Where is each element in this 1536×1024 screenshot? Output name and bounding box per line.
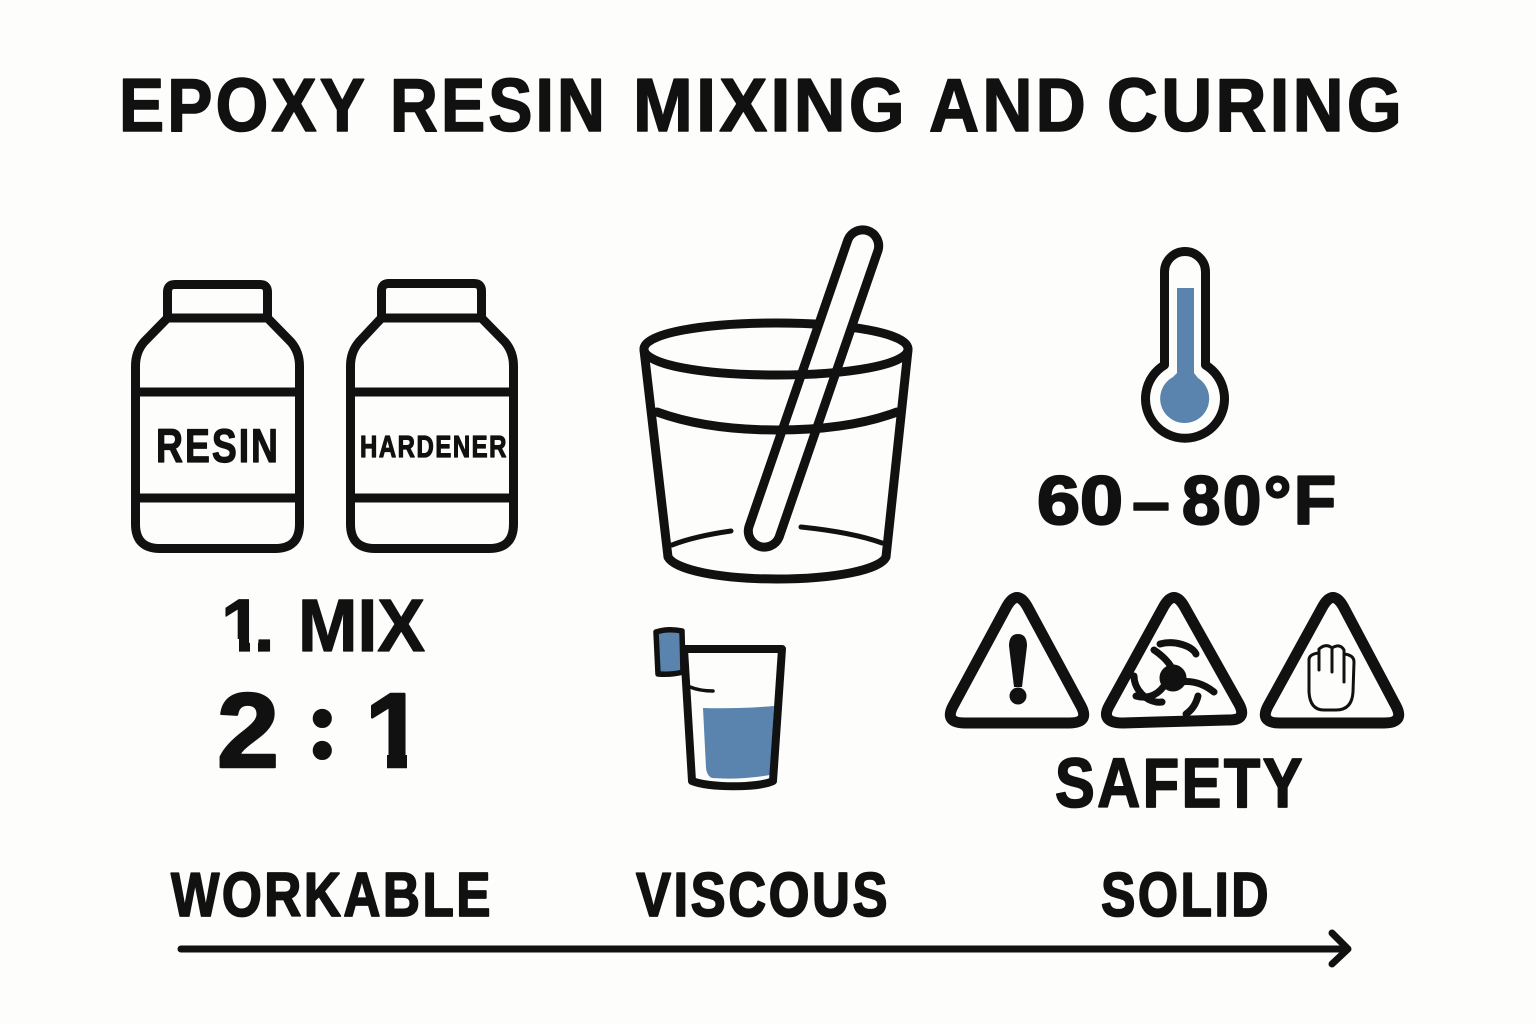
icon: mixing cup with stir stick bbox=[644, 230, 908, 579]
arrow: curing progress bbox=[181, 933, 1348, 964]
ratio: 2 to 1 bbox=[217, 668, 432, 790]
icon: mixing hazard triangle bbox=[1106, 598, 1242, 723]
label: hardener: HARDENER bbox=[360, 429, 508, 464]
title: MIXING bbox=[633, 63, 908, 147]
icon: resin jar bbox=[136, 284, 300, 548]
heading: safety: SAFETY bbox=[1055, 744, 1305, 822]
panel: safety bbox=[950, 598, 1399, 822]
icon: hardener jar bbox=[350, 284, 514, 548]
stage: solid: SOLID bbox=[1101, 861, 1271, 930]
heading: 1. mix: 1 bbox=[221, 584, 262, 667]
title: CURING bbox=[1107, 63, 1405, 147]
icon: thermometer bbox=[1146, 252, 1224, 438]
ratio: 2 to 1: 1 bbox=[365, 672, 424, 790]
heading: 1. mix: . bbox=[254, 584, 275, 667]
panel: curing timeline bbox=[171, 861, 1348, 964]
title bbox=[119, 63, 1405, 147]
title: RESIN bbox=[390, 63, 608, 147]
temperature range: 80°F bbox=[1182, 462, 1336, 539]
panel: mix step bbox=[136, 284, 514, 790]
ratio: 2 to 1: 2 bbox=[217, 672, 279, 790]
stage: viscous: VISCOUS bbox=[636, 861, 890, 930]
title: EPOXY bbox=[119, 63, 368, 147]
icon: small glass with blue liquid bbox=[656, 630, 782, 786]
temperature range: 60 bbox=[1037, 462, 1123, 539]
ratio: 2 to 1: : bbox=[306, 668, 339, 779]
heading: 1. mix bbox=[212, 584, 425, 667]
label: resin: RESIN bbox=[156, 419, 280, 472]
title: AND bbox=[929, 63, 1089, 147]
heading: 1. mix: MIX bbox=[298, 584, 425, 667]
stage: workable: WORKABLE bbox=[171, 861, 493, 930]
panel: temperature bbox=[1037, 252, 1336, 540]
temperature range bbox=[1037, 462, 1336, 540]
temperature range: – bbox=[1132, 463, 1170, 540]
icon: warning triangle bbox=[950, 598, 1084, 723]
icon: hand stop triangle bbox=[1265, 598, 1399, 723]
